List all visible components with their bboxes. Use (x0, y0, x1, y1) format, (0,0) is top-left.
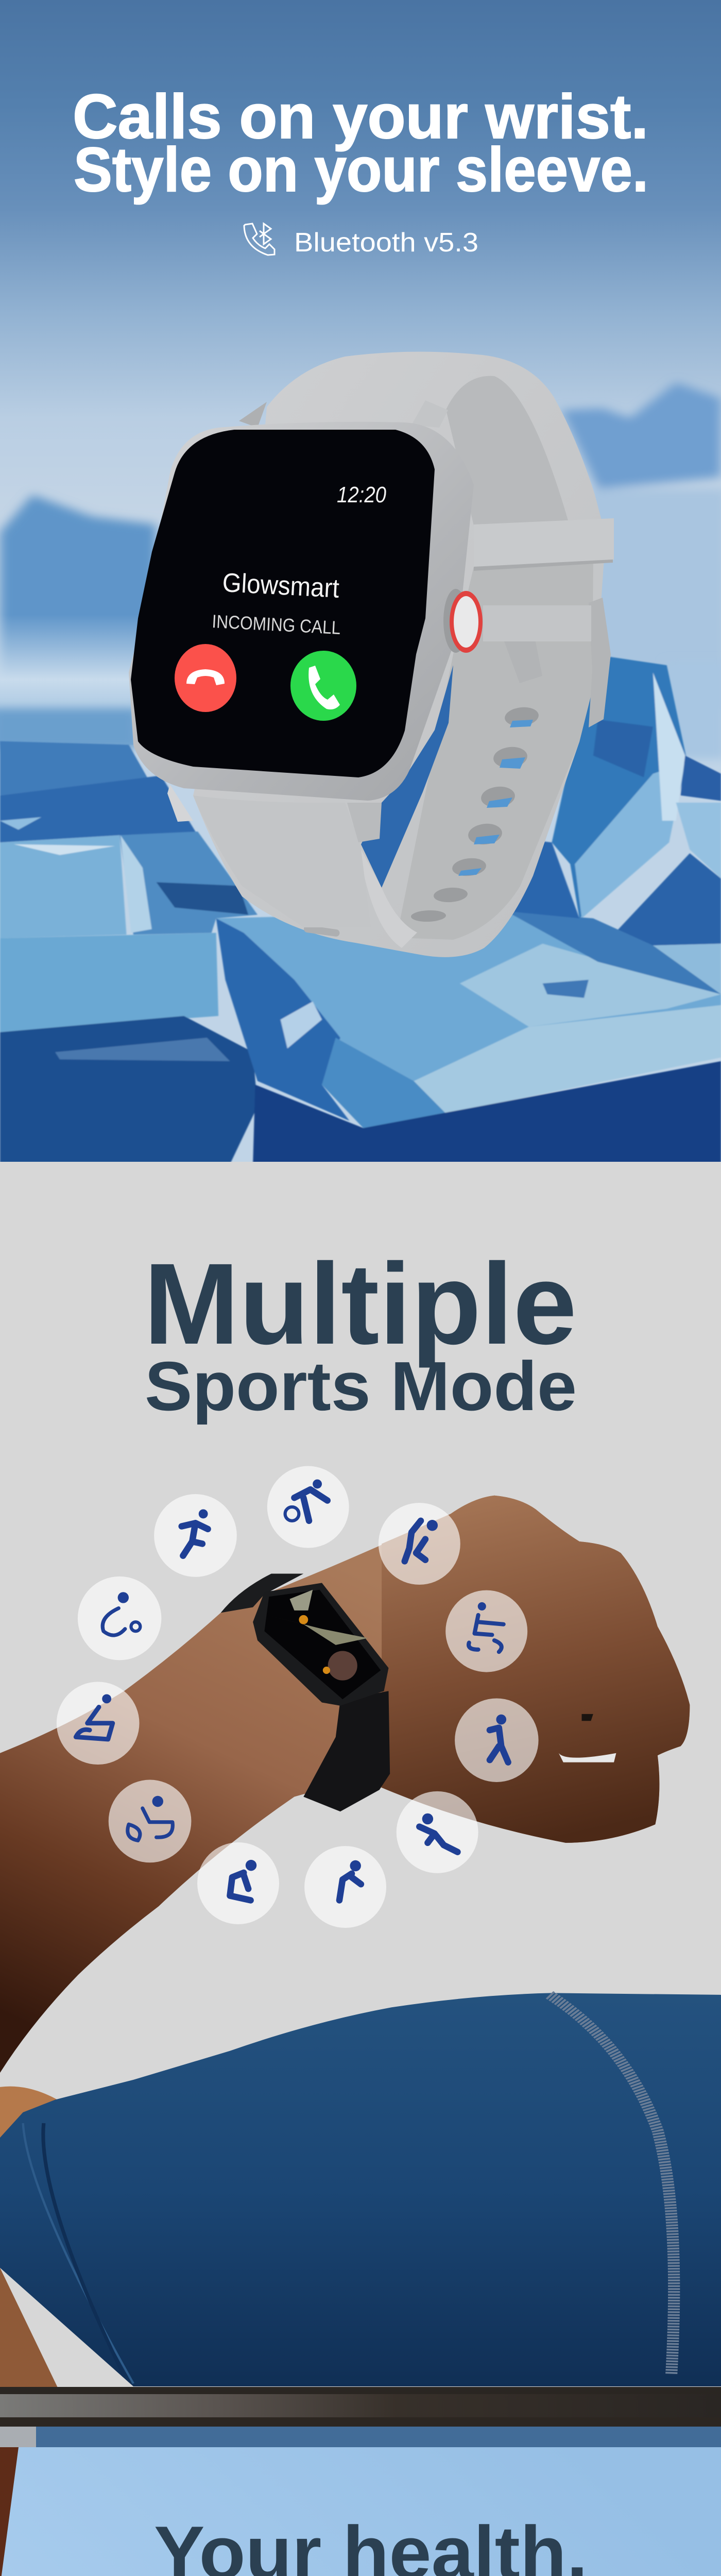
icon: decline call button (175, 644, 236, 712)
blue band (0, 2427, 721, 2447)
dark rail (0, 2387, 721, 2427)
caller name: Glowsmart (221, 568, 340, 604)
icon: crown with red ring (443, 589, 483, 653)
headline: Multiple (144, 1240, 577, 1368)
strap holes (303, 706, 540, 937)
wrist watch black (221, 1574, 390, 1811)
ice blocks (0, 615, 721, 1164)
arm with fist (0, 1496, 690, 2073)
title: Style on your sleeve. (74, 134, 648, 205)
subtitle: bluetooth: Bluetooth v5.3 (294, 228, 478, 258)
panel: your health on your wrist (0, 2447, 721, 2576)
screen time: 12:20 (337, 482, 386, 507)
incoming call label: INCOMING CALL (212, 611, 341, 638)
icon: accept call button (290, 651, 356, 721)
buckle (483, 598, 611, 727)
icon: watch strap grey (193, 352, 614, 957)
title: Calls on your wrist. (73, 81, 648, 151)
title (73, 81, 648, 205)
icon: bluetooth call (244, 224, 274, 255)
headline: Sports Mode (145, 1347, 577, 1425)
watch screen (131, 430, 435, 777)
sports icons (57, 1466, 539, 1928)
panel: calls on your wrist (0, 0, 721, 1164)
panel: multiple sports mode (0, 1162, 721, 2447)
watch case silver (129, 400, 474, 927)
headline (144, 1240, 577, 1425)
blue shirt sleeve (0, 1993, 721, 2387)
mountains background (0, 382, 721, 710)
